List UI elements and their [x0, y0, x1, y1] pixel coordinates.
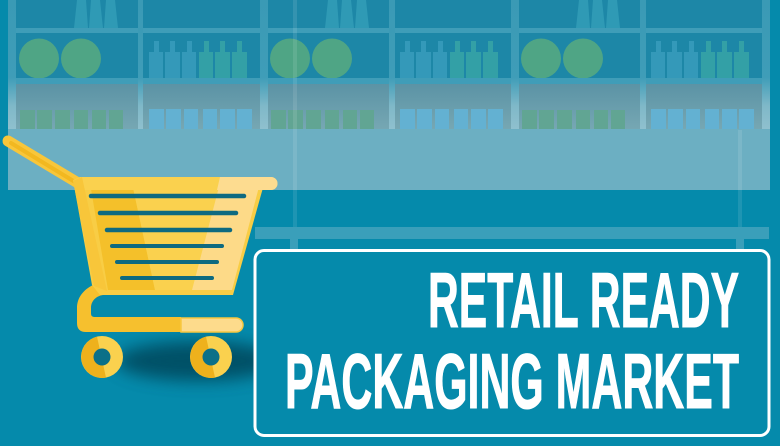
glass uprights: [293, 0, 742, 230]
glass stand: [255, 0, 769, 251]
cart handle: [8, 141, 78, 183]
lower frame: [77, 285, 243, 332]
stand legs: [290, 239, 744, 251]
basket middle panel: [132, 183, 220, 290]
basket body: [73, 177, 266, 295]
title: [285, 256, 739, 425]
counter: [8, 129, 770, 190]
shelf back panel: [8, 0, 770, 84]
shelf goods, bay 1: [19, 0, 252, 129]
basket light panel: [192, 183, 260, 290]
basket dark panel: [90, 183, 155, 290]
shelving unit: [8, 0, 770, 129]
basket wire lines: [91, 196, 244, 278]
right wheel: [190, 336, 232, 378]
left wheel: [81, 336, 123, 378]
horizontal shelf boards: [8, 28, 770, 84]
lower shelf back panel: [8, 84, 770, 129]
title panel frame: [255, 250, 769, 436]
stand crossbar: [255, 227, 769, 239]
title panel: [255, 250, 769, 436]
vertical shelf posts: [8, 0, 770, 129]
basket left edge: [73, 177, 107, 291]
cart shadow: [116, 341, 280, 381]
icon: shopping cart: [8, 141, 278, 378]
basket rim: [80, 177, 278, 190]
shelf goods, bay 3: [521, 0, 754, 129]
shelf goods, bay 2: [270, 0, 503, 129]
